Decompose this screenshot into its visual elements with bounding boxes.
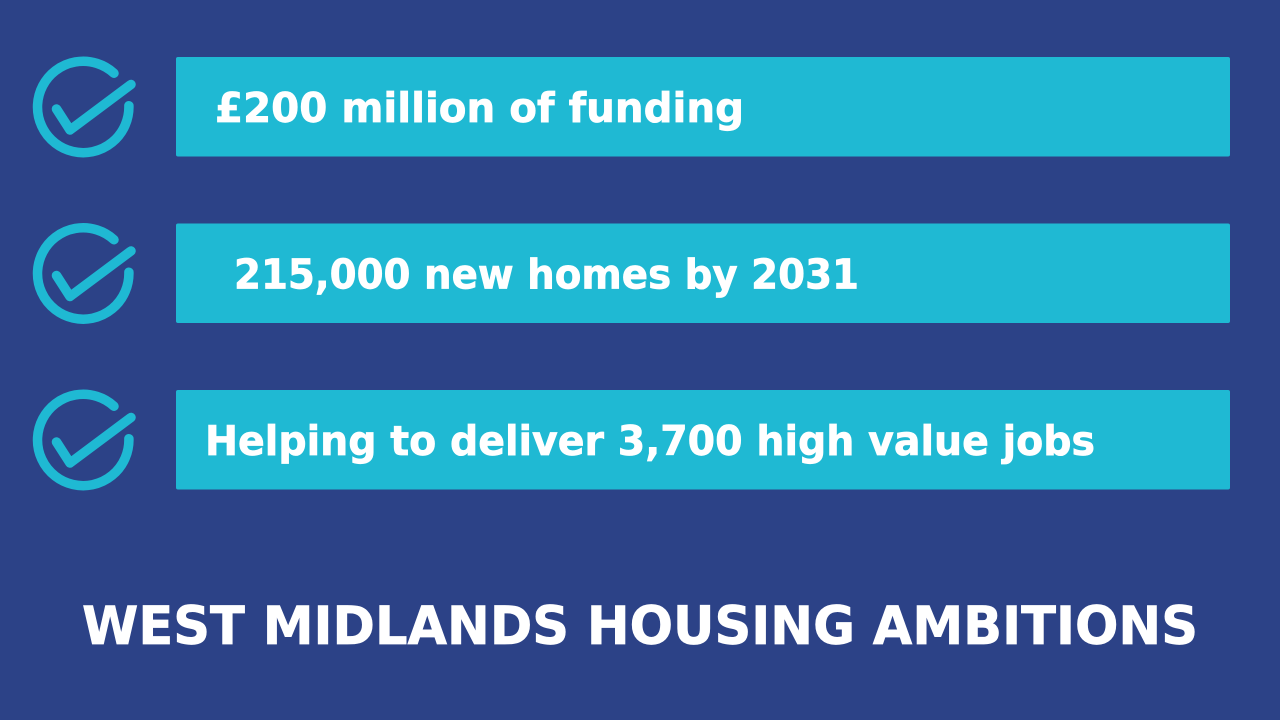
row: homes bbox=[38, 224, 1230, 323]
row: jobs bbox=[38, 390, 1230, 490]
text: funding: £200 million of funding bbox=[215, 84, 744, 132]
icon: check circle 1 bbox=[38, 61, 131, 153]
icon: check circle 3 bbox=[38, 394, 131, 486]
text: homes: 215,000 new homes by 2031 bbox=[234, 250, 859, 298]
bar 3 bbox=[176, 390, 1230, 490]
row: funding bbox=[38, 57, 1230, 156]
bar 2 bbox=[176, 224, 1230, 323]
bar 1 bbox=[176, 57, 1230, 156]
title: WEST MIDLANDS HOUSING AMBITIONS bbox=[82, 596, 1198, 657]
text: jobs: Helping to deliver 3,700 high value jobs bbox=[205, 417, 1095, 465]
icon: check circle 2 bbox=[38, 228, 131, 319]
